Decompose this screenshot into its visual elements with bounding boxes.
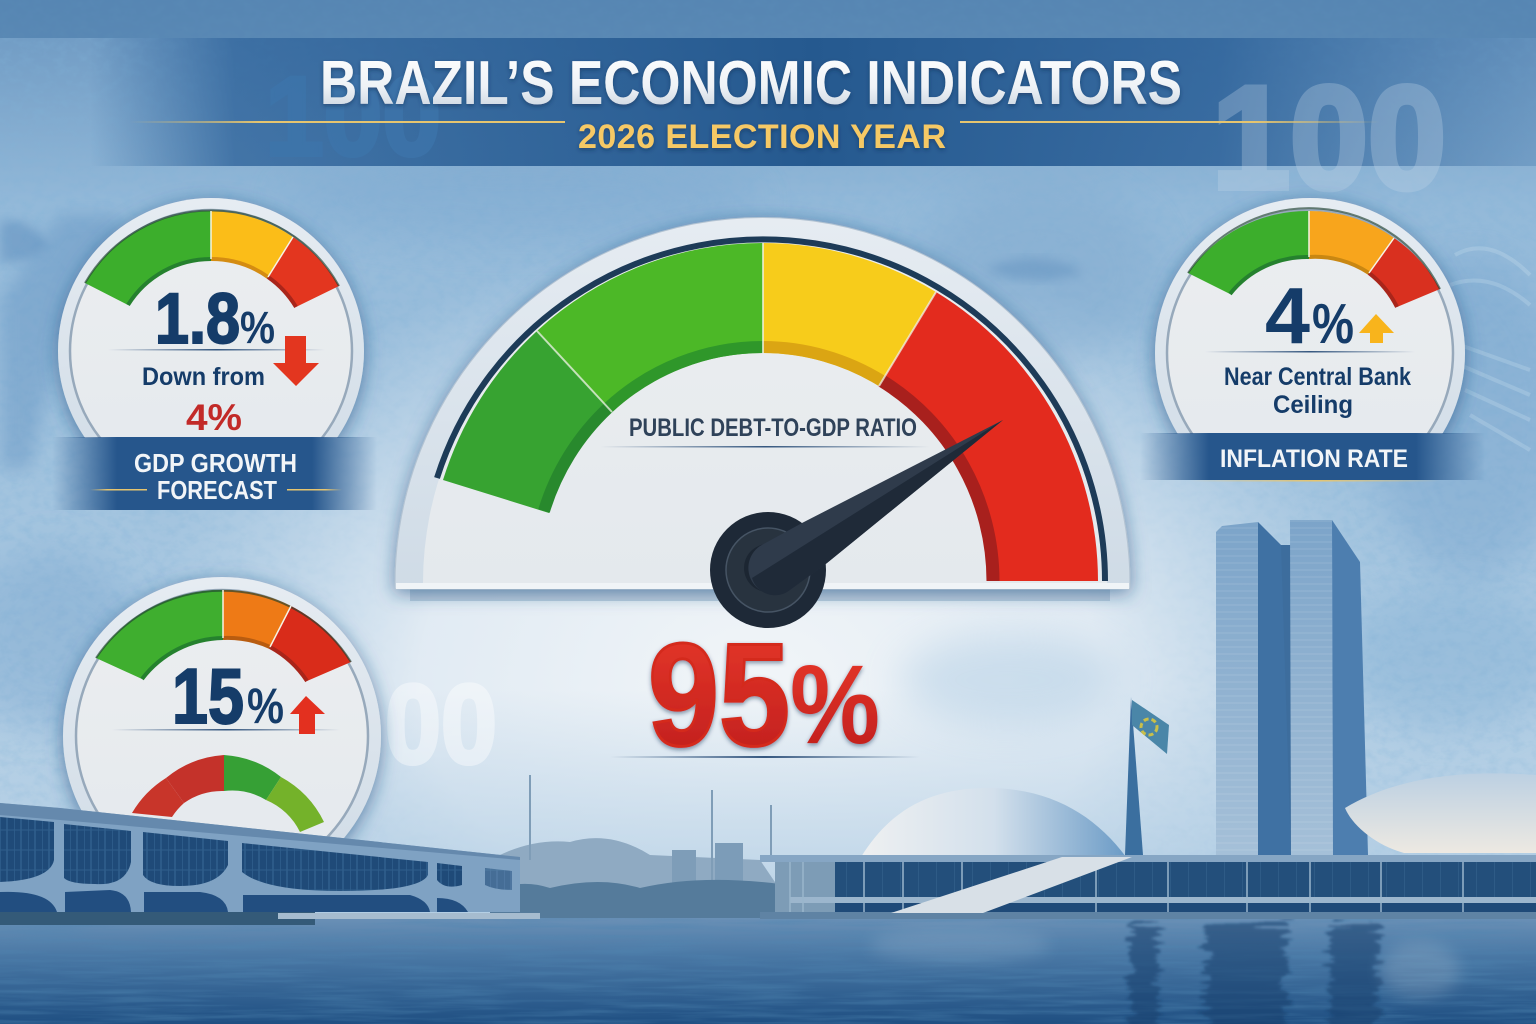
twin towers xyxy=(1216,520,1368,855)
congress base xyxy=(760,855,1536,919)
segment: red xyxy=(268,237,339,307)
plenary bowl xyxy=(1345,773,1536,853)
label banner: FORECAST xyxy=(157,475,277,505)
title banner xyxy=(0,0,1536,219)
label banner: INFLATION RATE xyxy=(1220,445,1408,473)
flag pole and flag xyxy=(1125,697,1169,855)
text: near central bank ceiling xyxy=(1224,363,1411,419)
segment: light green xyxy=(537,243,763,412)
value: 95%: % xyxy=(790,642,880,767)
value: 4% xyxy=(1265,271,1354,360)
value: 4%: % xyxy=(1312,292,1354,356)
panel: center gauge, public debt-to-GDP ratio xyxy=(395,217,1130,776)
water xyxy=(0,918,1536,1024)
title: BRAZIL’S ECONOMIC INDICATORS xyxy=(320,49,1182,118)
segment: dark green xyxy=(443,331,612,513)
upper glass bays xyxy=(0,817,512,891)
segment: red xyxy=(270,606,351,681)
gauge rim xyxy=(395,217,1130,589)
value: 15%: 15 xyxy=(172,652,244,740)
segment: green xyxy=(96,590,223,679)
text: down from: Down from xyxy=(142,363,265,391)
dial xyxy=(48,191,376,438)
watermark: 100 top right: 100 xyxy=(1212,56,1446,219)
value: 95%: 95 xyxy=(648,613,790,776)
segment: yellow xyxy=(211,211,293,277)
gauge shadow bar xyxy=(410,589,1110,601)
icon: up arrow xyxy=(1359,314,1394,343)
segment: green xyxy=(1188,211,1309,294)
gauge edge shading xyxy=(96,590,351,681)
dial xyxy=(63,577,381,895)
segment: red xyxy=(1369,238,1440,307)
subtitle: 2026 ELECTION YEAR xyxy=(578,118,946,156)
plenary dome xyxy=(861,788,1126,857)
segment: red xyxy=(879,292,1098,581)
value: 15%: % xyxy=(247,678,284,734)
segment: green xyxy=(85,211,211,305)
label banner xyxy=(1140,433,1485,482)
panel: GDP growth forecast xyxy=(52,198,377,510)
segment: orange xyxy=(223,590,291,647)
segment: orange xyxy=(1309,211,1394,273)
national congress buildings xyxy=(760,520,1536,919)
segment: yellow xyxy=(763,243,936,386)
mini gauge xyxy=(132,755,324,832)
watermark: 00 lower left: 00 xyxy=(385,662,497,787)
value: 1.8%: % xyxy=(240,302,275,353)
icon: up arrow xyxy=(290,696,325,734)
text: near central bank ceiling: Ceiling xyxy=(1273,391,1353,419)
label banner xyxy=(52,437,377,510)
value: 1.8%: 1.8 xyxy=(155,280,240,359)
skyline: distant city xyxy=(490,775,820,919)
lower glass bays xyxy=(0,890,468,912)
watermark: 100 top left: 100 xyxy=(265,54,441,179)
panel: inflation rate xyxy=(1140,198,1485,508)
gauge face xyxy=(423,239,1107,583)
dial xyxy=(1144,190,1476,434)
gauge label: PUBLIC DEBT-TO-GDP RATIO xyxy=(629,414,917,442)
planalto palace xyxy=(0,803,540,925)
dock xyxy=(0,912,315,925)
panel: lower left gauge, 15% xyxy=(63,577,381,895)
text: 4%: 4% xyxy=(186,397,242,438)
entrance ramp xyxy=(891,857,1132,913)
text: near central bank ceiling: Near Central Bank xyxy=(1224,363,1411,391)
needle and hub xyxy=(710,420,1003,628)
label banner: GDP GROWTH xyxy=(134,448,297,478)
value: 4%: 4 xyxy=(1265,271,1311,360)
icon: down arrow xyxy=(273,336,319,386)
